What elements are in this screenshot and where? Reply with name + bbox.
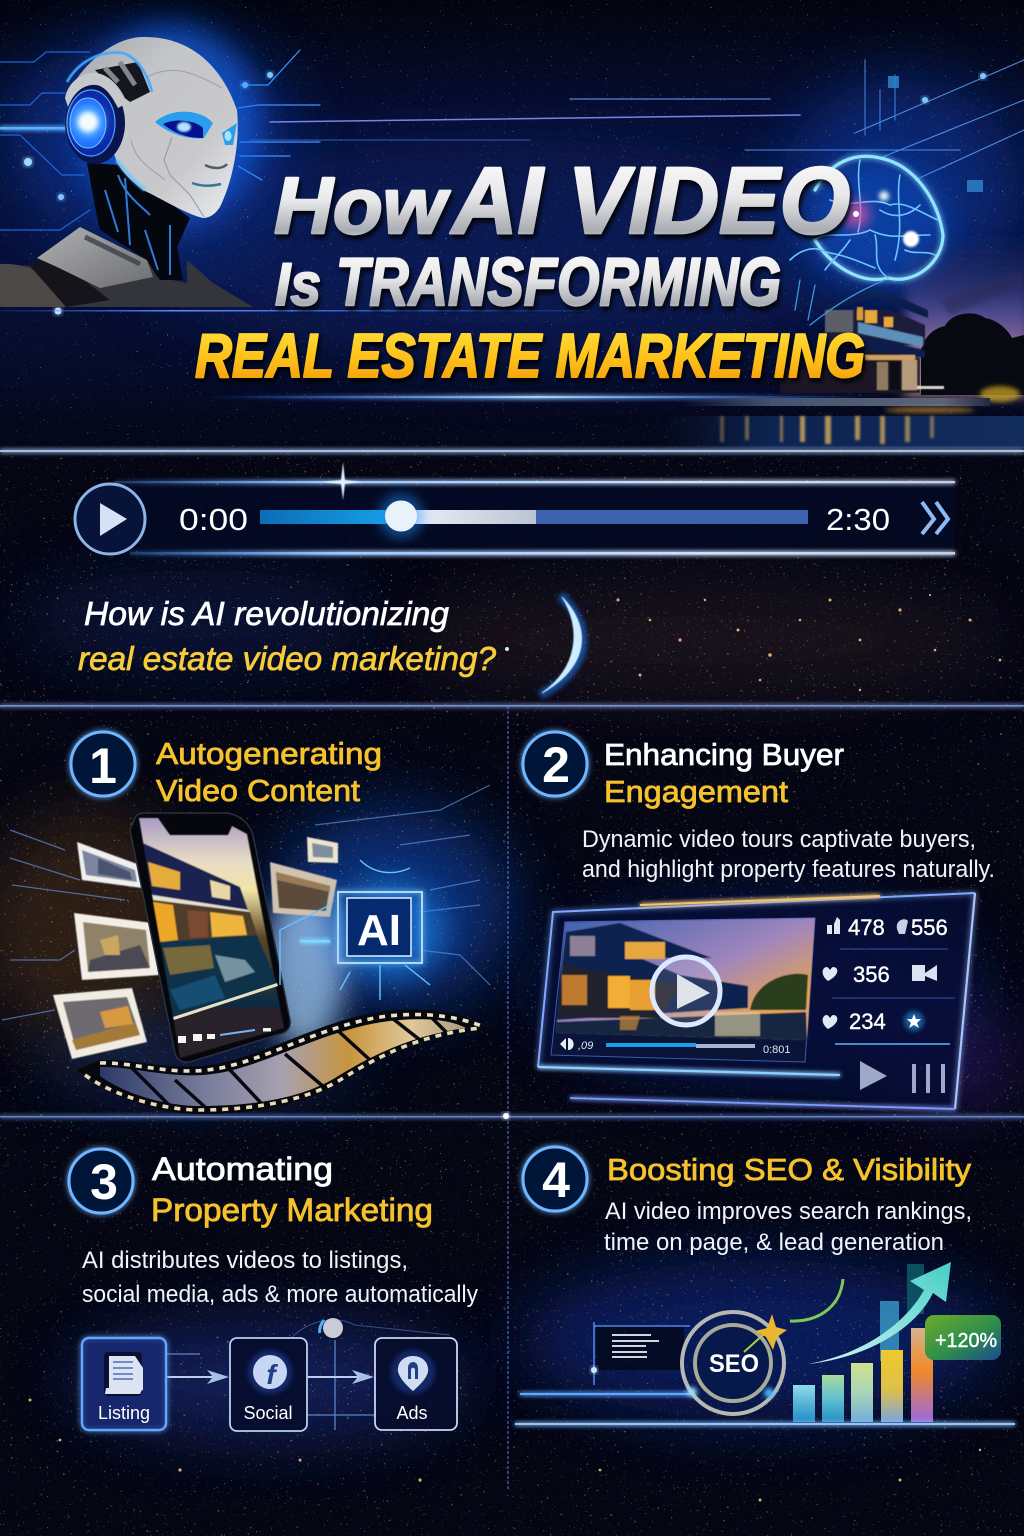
question text: real estate video marketing? [78,640,497,677]
start time: 0:00 [179,502,248,537]
warm star clusters [28,594,1001,1502]
video player bar [75,462,955,555]
body 4: time on page, & lead generation [604,1229,944,1256]
glow behind phone [265,890,345,1050]
heading 2 [604,737,844,809]
glowing shrub [980,386,1020,402]
crescent moon [505,595,583,695]
question text: How is AI revolutionizing [84,595,450,632]
header glowing rules [0,76,983,398]
SEO target: SEO [709,1350,759,1378]
brain illustration [790,156,948,325]
body 3: AI distributes videos to listings, [82,1247,408,1274]
number badge 4: 4 [542,1152,570,1208]
film strip [77,1010,487,1114]
title: How [274,161,451,250]
body 4: AI video improves search rankings, [605,1198,972,1225]
robot eyes [155,112,237,145]
phone house [143,843,248,910]
body 3 [82,1247,478,1308]
body 4 [604,1198,972,1256]
stat row 3: 234 [849,1009,886,1034]
sky, house and pool [660,225,1024,448]
heading 2: Engagement [604,774,788,809]
chevrons [922,502,948,534]
bottom player icons [860,1061,945,1093]
pool deck [680,398,990,406]
title [195,148,865,391]
tree silhouette [921,313,1024,395]
growth bars [793,1264,933,1422]
video controls: 0:801 [763,1044,791,1056]
title: REAL ESTATE MARKETING [195,322,865,391]
robot neck [87,163,190,280]
title: Is [275,251,321,318]
panel 2: enhancing buyer engagement [523,732,995,1109]
ads box [375,1338,457,1430]
video controls [560,1038,791,1056]
question text [78,595,497,677]
photo cards left [53,842,159,1059]
AI chip [280,860,445,1000]
listing box [82,1338,166,1430]
growth badge: +120% [935,1330,997,1352]
header divider line [0,450,1024,452]
SEO target [682,1312,787,1414]
body 2 [582,826,995,883]
title: AI VIDEO [450,148,850,254]
stat row 2 [823,962,937,987]
heading 1: Video Content [156,773,360,808]
listing box: Listing [98,1403,150,1423]
heading 2: Enhancing Buyer [604,737,844,772]
heading 3: Automating [152,1151,333,1187]
stat row 1: 556 [911,915,948,940]
heading 3: Property Marketing [151,1192,433,1228]
base glow line [515,1423,1015,1425]
growth badge [925,1315,1001,1360]
number badge 1 [71,732,135,796]
stat row 3 [823,1009,924,1034]
number badge 2: 2 [542,737,570,793]
heading 1 [156,736,382,808]
heading 4: Boosting SEO & Visibility [607,1152,972,1187]
section grid lines [0,705,1024,1490]
progress track [260,494,808,538]
tech circuit lines in header [0,50,1024,314]
floating cards right [270,837,338,917]
workflow connector lines [165,1320,450,1430]
panel 1: autogenerating video content [2,732,490,1114]
AI chip: AI [357,906,401,955]
number badge 3 [69,1149,133,1213]
social box: f [266,1359,278,1390]
document icon [520,1322,690,1395]
social box [230,1338,307,1431]
heading 1: Autogenerating [156,736,382,771]
robot ear ring [65,53,152,164]
stat row 2: 356 [853,962,890,987]
circuit lines [2,785,490,1020]
pool water [660,416,1024,448]
heading 3 [151,1151,433,1228]
smartphone [130,813,290,1062]
house [780,285,944,393]
video thumbnail [551,918,815,1062]
social box: Social [243,1403,293,1423]
video card frame [538,893,975,1109]
number badge 3: 3 [90,1154,118,1210]
body 3: social media, ads & more automatically [82,1281,478,1308]
rising arrow [808,1262,951,1364]
body 2: Dynamic video tours captivate buyers, [582,826,976,853]
play button [75,484,145,554]
robot illustration [0,25,260,307]
stat row 1: 478 [848,915,885,940]
panel 4: boosting seo and visibility [515,1147,1015,1425]
robot head [67,37,238,218]
number badge 2 [523,732,587,796]
robot nose and mouth [192,164,227,186]
green swoosh [790,1279,843,1321]
number badge 1: 1 [89,738,117,794]
connector node [320,1318,343,1338]
body 2: and highlight property features naturally. [582,856,995,883]
panel 3: automating property marketing [69,1149,478,1431]
video controls: ,09 [578,1040,593,1052]
end time: 2:30 [826,502,890,537]
ads box: Ads [396,1403,428,1423]
stat row 1 [827,915,948,940]
robot shoulders [0,227,253,307]
number badge 4 [523,1147,587,1211]
title: TRANSFORMING [336,244,781,320]
